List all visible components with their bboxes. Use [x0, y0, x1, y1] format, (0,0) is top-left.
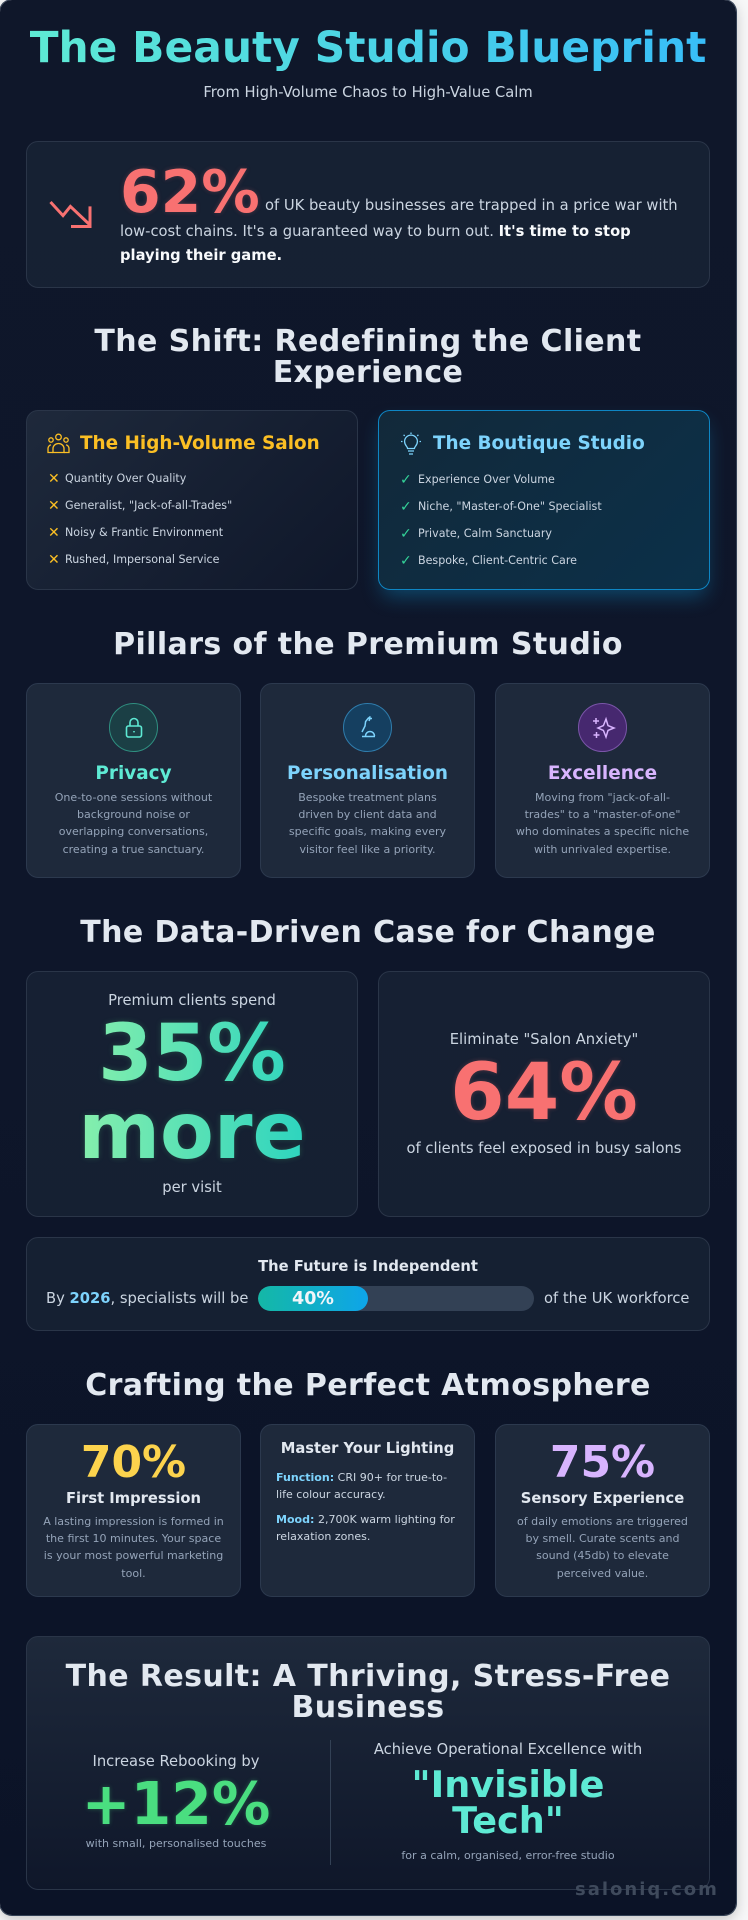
list item [48, 552, 219, 568]
big figure: 35% more: more [78, 1086, 306, 1177]
panel: salon anxiety stat [378, 971, 710, 1217]
panel: high-volume salon: ✕ [48, 471, 60, 487]
panel: sensory experience [495, 1424, 710, 1597]
panel: high-volume salon: ✕ [48, 498, 60, 514]
description: sensory experience: perceived value. [557, 1567, 648, 1580]
panel: future independent [26, 1237, 710, 1331]
big figure: 64%: 64% [450, 1047, 638, 1138]
figure: 75%: 75% [550, 1437, 655, 1488]
description: personalisation: driven by client data and [298, 808, 437, 821]
description: privacy: One-to-one sessions without [55, 791, 212, 804]
panel: boutique studio: ✓ [400, 553, 412, 569]
figure: invisible tech [412, 1763, 604, 1842]
hero text [120, 158, 678, 264]
panel: high-volume salon: Rushed, Impersonal Service [65, 553, 219, 566]
label: of the UK workforce: of the UK workforce [544, 1290, 689, 1307]
figure: invisible tech: Tech" [452, 1799, 564, 1842]
description: excellence: with unrivaled expertise. [534, 843, 671, 856]
heading: pillars: Pillars of the Premium Studio [113, 627, 623, 662]
description: personalisation: visitor feel like a priority. [300, 843, 435, 856]
panel: boutique studio: ✓ [400, 499, 412, 515]
icon: padlock [109, 703, 158, 752]
heading: the result: The Result: A Thriving, Stress-Free [66, 1659, 670, 1694]
panel: boutique studio: Experience Over Volume [418, 473, 555, 486]
62 percent figure: 62% [120, 158, 260, 226]
hero line 2: low-cost chains. It's a guaranteed way to burn out. It's time to stop [120, 223, 631, 240]
big figure: 35% more: 35% [98, 1008, 286, 1099]
list item [400, 499, 602, 515]
figure: +12%: +12% [82, 1770, 270, 1838]
heading: master your lighting: Master Your Lighting [281, 1440, 454, 1457]
divider [330, 1740, 331, 1865]
lighting: function [276, 1471, 447, 1501]
hero line 1: of UK beauty businesses are trapped in a price war with [265, 197, 678, 214]
panel: boutique studio: Private, Calm Sanctuary [418, 527, 552, 540]
description: first impression [43, 1515, 224, 1580]
description: first impression: is your most powerful marketing [44, 1549, 223, 1562]
panel: boutique studio: ✓ [400, 472, 412, 488]
panel: premium spend stat [26, 971, 358, 1217]
label: clients feel exposed: of clients feel exposed in busy salons [407, 1140, 681, 1157]
icon: group of people [47, 434, 70, 454]
heading: boutique studio: The Boutique Studio [433, 433, 645, 454]
heading: privacy: Privacy [95, 763, 172, 784]
label: increase rebooking: Increase Rebooking by [93, 1753, 259, 1770]
list item [48, 471, 186, 487]
label: by 2026: By 2026, specialists will be [46, 1290, 248, 1307]
heading: personalisation: Personalisation [287, 763, 448, 784]
label: achieve operational excellence: Achieve Operational Excellence with [374, 1741, 642, 1758]
panel: high-volume salon: Quantity Over Quality [65, 472, 186, 485]
heading: future is independent: The Future is Independent [258, 1258, 478, 1275]
heading: the shift: Experience [273, 354, 463, 390]
description: sensory experience: of daily emotions are triggered [517, 1515, 688, 1528]
heading: the shift [94, 324, 642, 390]
lighting: function: Function: CRI 90+ for true-to- [276, 1471, 447, 1484]
description: privacy [55, 791, 212, 856]
description: personalisation: specific goals, making every [289, 825, 446, 838]
list item [48, 525, 223, 541]
panel: high-volume salon: ✕ [48, 552, 60, 568]
heading: excellence: Excellence [548, 763, 657, 784]
panel: boutique studio [378, 410, 710, 590]
panel: boutique studio: Niche, "Master-of-One" Specialist [418, 500, 602, 513]
panel: boutique studio: Bespoke, Client-Centric Care [418, 554, 577, 567]
description: privacy: background noise or [77, 808, 190, 821]
description: privacy: overlapping conversations, [59, 825, 208, 838]
label: per visit: per visit [162, 1179, 222, 1196]
heading: the result [66, 1659, 670, 1724]
panel: excellence [495, 683, 710, 878]
panel: high-volume salon: Generalist, "Jack-of-all-Trades" [65, 499, 232, 512]
right result column [374, 1741, 642, 1862]
caption: error-free studio: for a calm, organised, error-free studio [401, 1849, 615, 1862]
description: privacy: creating a true sanctuary. [63, 843, 204, 856]
hero line 3: playing their game. [120, 247, 282, 264]
description: sensory experience [517, 1515, 688, 1580]
caption: personalised touches: with small, personalised touches [86, 1837, 266, 1850]
panel: personalisation [260, 683, 475, 878]
description: first impression: tool. [121, 1567, 146, 1580]
lighting: mood: Mood: 2,700K warm lighting for [276, 1513, 455, 1526]
subtitle: From High-Volume Chaos to High-Value Calm [203, 84, 533, 101]
left result column [82, 1753, 270, 1850]
panel: master your lighting [260, 1424, 475, 1597]
lighting: function: life colour accuracy. [276, 1488, 386, 1501]
panel: hero statistic [26, 141, 710, 288]
description: sensory experience: by smell. Curate scents and [526, 1532, 680, 1545]
big figure: 35% more [78, 1008, 306, 1177]
description: personalisation [289, 791, 446, 856]
heading: data-driven case: The Data-Driven Case for Change [80, 915, 656, 950]
description: first impression: the first 10 minutes. Your space [46, 1532, 221, 1545]
list item [400, 553, 577, 569]
heading: crafting atmosphere: Crafting the Perfect Atmosphere [85, 1368, 651, 1403]
description: personalisation: Bespoke treatment plans [298, 791, 437, 804]
heading: the result: Business [292, 1690, 444, 1724]
progress fill: 40% [292, 1289, 334, 1309]
heading: high-volume salon: The High-Volume Salon [80, 433, 320, 454]
progress fill [258, 1286, 368, 1311]
description: sensory experience: sound (45db) to elevate [536, 1549, 669, 1562]
icon: salon lamp [343, 703, 392, 752]
progress bar: 40% [258, 1286, 534, 1311]
icon: sparkles [578, 703, 627, 752]
label: premium clients spend: Premium clients spend [108, 992, 276, 1009]
description: first impression: A lasting impression is formed in [43, 1515, 224, 1528]
list item [48, 498, 232, 514]
figure: 70%: 70% [81, 1437, 186, 1488]
list item [400, 472, 555, 488]
heading: first impression: First Impression [66, 1490, 201, 1507]
icon: trending down arrow [50, 201, 92, 228]
panel: the result [26, 1636, 710, 1890]
lighting: mood: relaxation zones. [276, 1530, 370, 1543]
label: eliminate salon anxiety: Eliminate "Salon Anxiety" [450, 1031, 638, 1048]
panel: high-volume salon [26, 410, 358, 590]
heading: the shift: The Shift: Redefining the Client [94, 324, 642, 359]
watermark: saloniq.com [575, 1879, 719, 1900]
panel: boutique studio: ✓ [400, 526, 412, 542]
description: excellence [516, 791, 689, 856]
description: excellence: who dominates a specific niche [516, 825, 689, 838]
list item [400, 526, 552, 542]
description: excellence: Moving from "jack-of-all- [535, 791, 670, 804]
heading: sensory experience: Sensory Experience [521, 1490, 684, 1507]
lighting: mood [276, 1513, 455, 1543]
panel: high-volume salon: ✕ [48, 525, 60, 541]
panel: high-volume salon: Noisy & Frantic Environment [65, 526, 223, 539]
title: The Beauty Studio Blueprint [30, 23, 706, 72]
description: excellence: trades" to a "master-of-one" [525, 808, 680, 821]
panel: privacy [26, 683, 241, 878]
panel: first impression [26, 1424, 241, 1597]
icon: lightbulb [401, 432, 421, 455]
figure: invisible tech: "Invisible [412, 1763, 604, 1806]
